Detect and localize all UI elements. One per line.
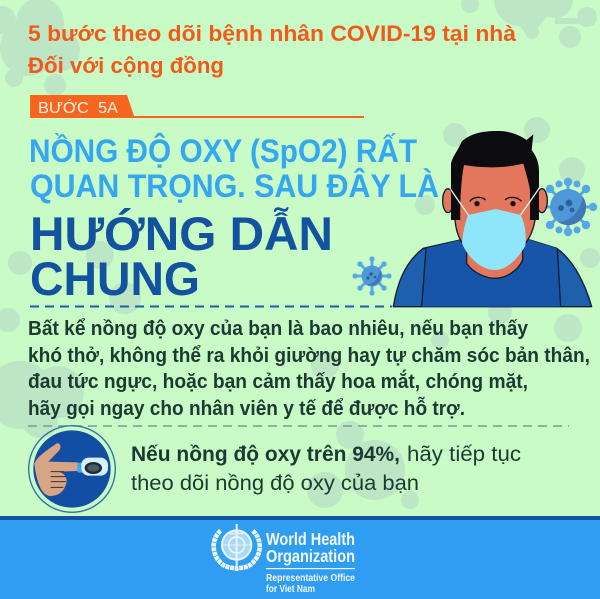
illustration: man with mask [393, 131, 592, 307]
heading: main: HƯỚNG DẪN [30, 207, 333, 260]
footer band [0, 516, 600, 599]
WHO wordmark: Representative Office [266, 572, 355, 584]
WHO wordmark: Organization [266, 546, 355, 566]
shirt [393, 240, 592, 307]
body text: đau tức ngực, hoặc bạn cảm thấy hoa mắt, chóng mặt, [28, 369, 528, 393]
WHO wordmark [266, 529, 355, 595]
callout text: Nếu nồng độ oxy trên 94%, [131, 443, 400, 466]
lower divider [28, 425, 569, 427]
title: Đối với cộng đồng [28, 53, 224, 78]
body text: hãy gọi ngay cho nhân viên y tế để được hỗ trợ. [28, 396, 465, 420]
mask straps [451, 188, 539, 215]
neck [467, 247, 523, 278]
callout text: hãy tiếp tục [407, 443, 521, 466]
icon: virus large [539, 178, 597, 236]
heading: main: CHUNG [30, 252, 200, 305]
heading: subtitle [29, 133, 439, 204]
dashed divider [30, 306, 392, 308]
mask [462, 209, 526, 270]
eyes [474, 201, 480, 206]
step badge: BƯỚC 5A [38, 98, 118, 117]
title: 5 bước theo dõi bệnh nhân COVID-19 tại nhà [28, 21, 516, 46]
icon: hand with pulse oximeter [29, 426, 115, 512]
WHO wordmark: for Viet Nam [266, 583, 315, 595]
heading: subtitle: QUAN TRỌNG. SAU ĐÂY LÀ [30, 168, 439, 204]
WHO wordmark: World Health [266, 529, 355, 549]
icon: WHO emblem [214, 524, 260, 569]
ears [443, 189, 453, 213]
callout text: theo dõi nồng độ oxy của bạn [131, 472, 419, 495]
body text: Bất kể nồng độ oxy của bạn là bao nhiêu, nếu bạn thấy [28, 317, 529, 340]
step badge [30, 95, 364, 118]
callout text [131, 443, 521, 495]
title [28, 21, 516, 78]
heading: main [30, 207, 333, 305]
body text [28, 317, 590, 420]
icon: virus small [352, 256, 392, 296]
heading: subtitle: NỒNG ĐỘ OXY (SpO2) RẤT [29, 133, 417, 169]
hair [451, 131, 539, 220]
face [455, 163, 535, 260]
